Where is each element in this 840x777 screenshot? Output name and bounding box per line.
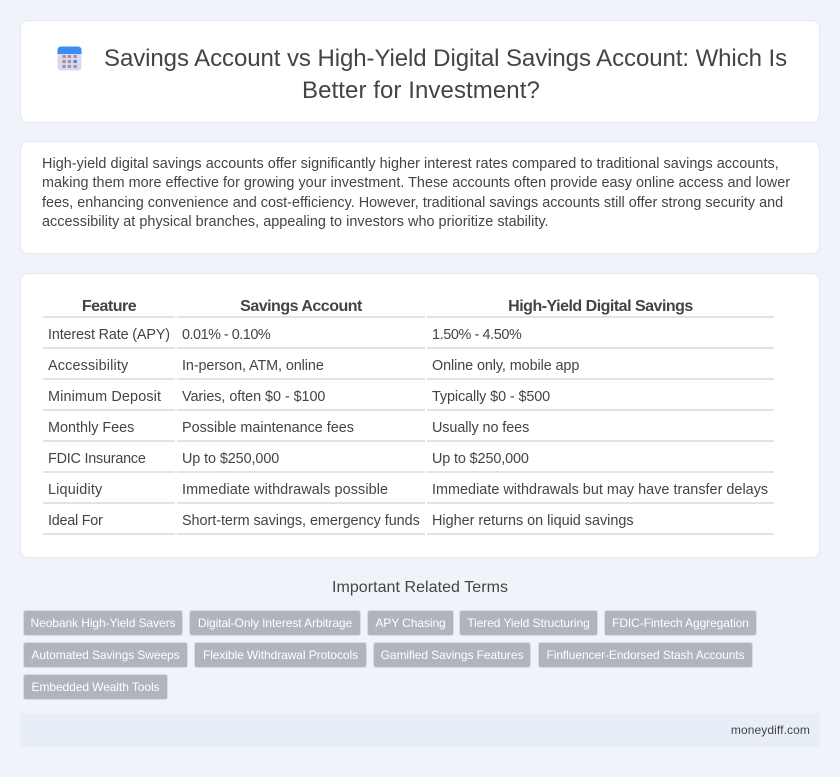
row: ideal for (48, 513, 634, 529)
row: ideal for: Higher returns on liquid savings (432, 513, 634, 529)
row: monthly fees: Usually no fees (432, 420, 529, 436)
tag (23, 642, 188, 668)
footer bar (20, 713, 820, 747)
row: interest rate: 1.50% - 4.50% (432, 327, 521, 343)
tag: FDIC-Fintech Aggregation (612, 616, 749, 630)
row: liquidity: Immediate withdrawals possible (182, 482, 388, 498)
tag (194, 642, 367, 668)
row: liquidity (48, 482, 768, 498)
tag: APY Chasing (375, 616, 446, 630)
table header (82, 298, 693, 315)
title: Savings Account vs High-Yield Digital Savings Account: Which Is (104, 45, 787, 72)
tag: Gamified Savings Features (381, 648, 523, 662)
row: monthly fees: Possible maintenance fees (182, 420, 354, 436)
row: accessibility: Online only, mobile app (432, 358, 579, 374)
row: accessibility (48, 358, 579, 374)
tag (459, 610, 598, 636)
row: liquidity: Liquidity (48, 482, 102, 498)
row: interest rate: Interest Rate (APY) (48, 327, 170, 343)
row: monthly fees (48, 420, 529, 436)
row: minimum deposit: Typically $0 - $500 (432, 389, 550, 405)
tag (538, 642, 753, 668)
row: liquidity: Immediate withdrawals but may have transfer delays (432, 482, 768, 498)
row: minimum deposit: Varies, often $0 - $100 (182, 389, 325, 405)
footer source: moneydiff.com (731, 723, 810, 737)
tag: Tiered Yield Structuring (467, 616, 590, 630)
tag (189, 610, 361, 636)
table header: High-Yield Digital Savings (508, 298, 693, 315)
table header: Savings Account (240, 298, 362, 315)
row: accessibility: In-person, ATM, online (182, 358, 324, 374)
tag (367, 610, 454, 636)
intro paragraph: making them more effective for growing your investment. These accounts often provide easy online access and lower (42, 175, 790, 191)
tag: Digital-Only Interest Arbitrage (198, 616, 352, 630)
intro paragraph (42, 156, 790, 230)
row: accessibility: Accessibility (48, 358, 128, 374)
intro paragraph: High-yield digital savings accounts offer significantly higher interest rates compared to traditional savings accounts, (42, 156, 779, 172)
heading: related terms: Important Related Terms (332, 579, 508, 596)
panel: title card (20, 20, 820, 123)
row: minimum deposit (48, 389, 550, 405)
tag: Neobank High-Yield Savers (31, 616, 175, 630)
row: interest rate: 0.01% - 0.10% (182, 327, 270, 343)
tag (23, 610, 183, 636)
row: FDIC insurance: FDIC Insurance (48, 451, 146, 467)
tag: Flexible Withdrawal Protocols (203, 648, 358, 662)
tag (604, 610, 757, 636)
row: FDIC insurance: Up to $250,000 (182, 451, 279, 467)
row: minimum deposit: Minimum Deposit (48, 389, 161, 405)
tag: Automated Savings Sweeps (31, 648, 180, 662)
tag: Finfluencer-Endorsed Stash Accounts (546, 648, 744, 662)
tag (373, 642, 531, 668)
panel: comparison table (20, 273, 820, 558)
row: interest rate (48, 327, 522, 343)
row: monthly fees: Monthly Fees (48, 420, 134, 436)
tag (23, 674, 168, 700)
row: ideal for: Short-term savings, emergency funds (182, 513, 420, 529)
row: FDIC insurance (48, 451, 529, 467)
icon: calendar (58, 46, 82, 70)
row: ideal for: Ideal For (48, 513, 103, 529)
intro paragraph: accessibility at physical branches, appealing to investors who prioritize stability. (42, 214, 549, 230)
intro paragraph: fees, enhancing convenience and cost-efficiency. However, traditional savings accounts still offer strong security and (42, 195, 783, 211)
table header: Feature (82, 298, 136, 315)
tag: Embedded Wealth Tools (32, 680, 159, 694)
row: FDIC insurance: Up to $250,000 (432, 451, 529, 467)
panel: intro text (20, 141, 820, 254)
tag list (23, 610, 757, 700)
title line 2: Better for Investment? (302, 77, 540, 104)
